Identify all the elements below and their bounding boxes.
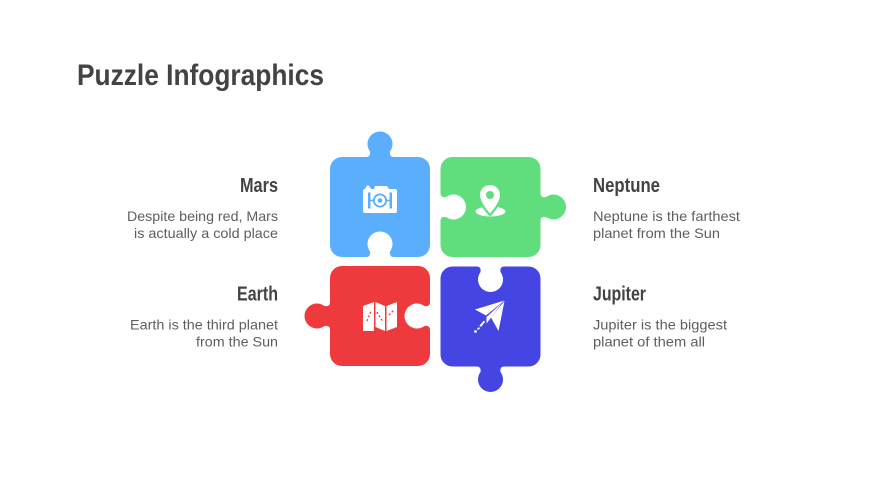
heading: Jupiter: Jupiter <box>593 284 646 306</box>
heading: Mars: Mars <box>240 175 278 197</box>
text block: Earth description: from the Sun <box>196 334 278 350</box>
text block: Neptune description: planet from the Sun <box>593 225 720 241</box>
text block: Jupiter description: planet of them all <box>593 334 705 350</box>
text block: Neptune description <box>593 208 740 241</box>
text block: Mars description <box>127 208 278 241</box>
puzzle piece: green <box>440 157 566 257</box>
puzzle piece: indigo <box>440 266 540 392</box>
text block: Neptune description: Neptune is the farthest <box>593 208 740 224</box>
icon: folded map <box>363 302 397 331</box>
panel: Jupiter text <box>593 284 727 350</box>
puzzle piece: red <box>304 266 430 366</box>
text block: Earth description: Earth is the third planet <box>130 316 278 332</box>
heading: Earth: Earth <box>237 284 278 306</box>
icon: camera <box>363 186 397 213</box>
icon: location pin <box>476 183 506 216</box>
text block: Earth description <box>130 316 278 350</box>
icon: paper plane <box>474 300 504 333</box>
puzzle piece: blue <box>330 132 430 257</box>
text block: Jupiter description: Jupiter is the biggest <box>593 316 727 332</box>
panel: Neptune text <box>593 175 740 241</box>
panel: Earth text <box>130 284 278 350</box>
title: Puzzle Infographics <box>77 59 324 92</box>
panel: Mars text <box>127 175 278 241</box>
heading: Neptune: Neptune <box>593 175 660 197</box>
text block: Jupiter description <box>593 316 727 350</box>
text block: Mars description: Despite being red, Mars <box>127 208 278 224</box>
text block: Mars description: is actually a cold place <box>134 225 278 241</box>
